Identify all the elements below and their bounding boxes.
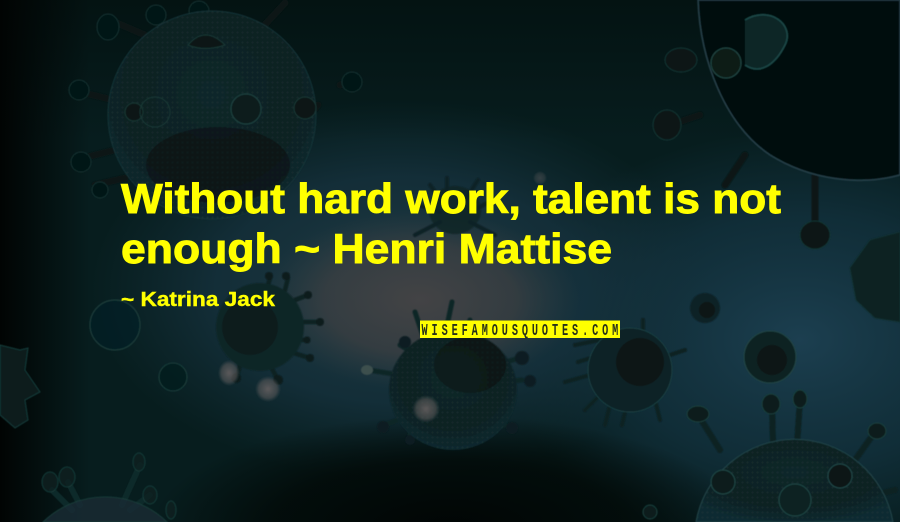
badge: wisefamousquotes.com: WISEFAMOUSQUOTES.COM — [422, 322, 618, 341]
virus: bottom right — [643, 390, 895, 522]
virus: small top centre — [415, 178, 495, 235]
virus: outline left — [90, 300, 140, 350]
virus: right edge — [850, 232, 900, 322]
quote line 2: enough ~ Henri Mattise — [121, 225, 612, 272]
quote line 1: Without hard work, talent is not — [121, 175, 781, 222]
virus: outline right — [744, 331, 796, 383]
virus: far left edge — [0, 345, 40, 428]
virus: bottom centre — [361, 302, 536, 450]
virus: bottom left — [42, 453, 176, 522]
author: ~ Katrina Jack — [121, 289, 276, 311]
light spots — [218, 171, 547, 423]
virus: large top left — [69, 1, 362, 219]
virus: centre right — [565, 320, 685, 425]
quote text — [121, 175, 781, 272]
virus: large top right — [653, 0, 900, 249]
virus: medium centre left — [216, 272, 324, 385]
virus: tiny outline left — [159, 363, 187, 391]
virus: small upper right — [690, 293, 720, 323]
